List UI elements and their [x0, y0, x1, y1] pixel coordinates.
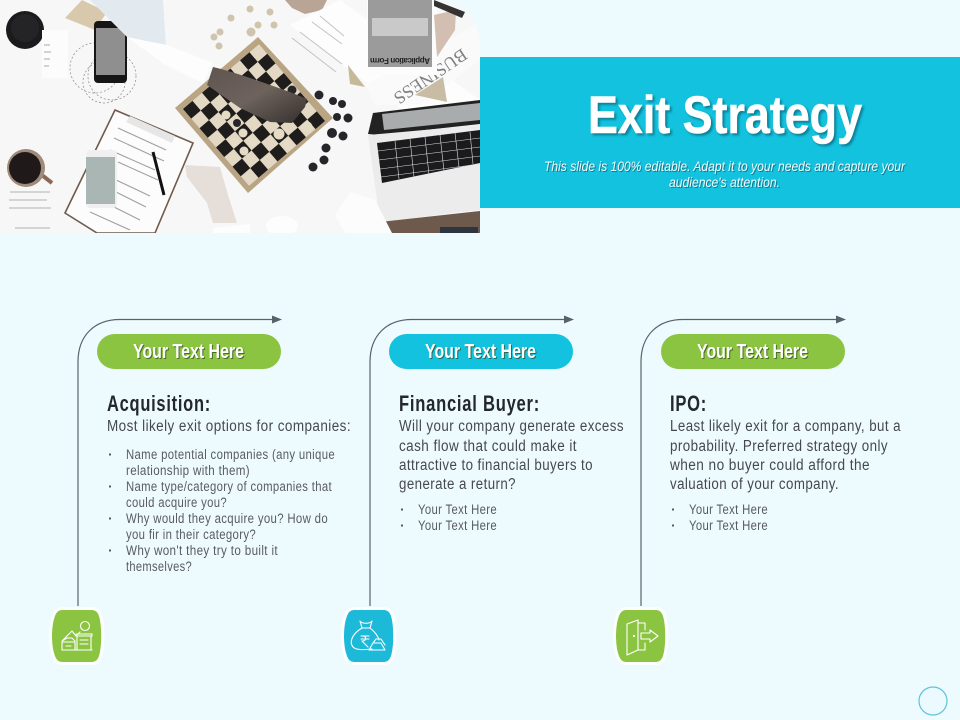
pill label: Your Text Here: [133, 340, 244, 363]
arrow connector: [78, 316, 282, 606]
description: Most likely exit options for companies:: [107, 418, 351, 435]
subtitle: This slide is 100% editable. Adapt it to your needs and capture your: [544, 159, 905, 174]
coffee mug: [7, 149, 52, 187]
photo: chess game on a business desk: [0, 0, 480, 236]
bullet list: [672, 502, 768, 533]
heading: IPO:: [670, 391, 707, 416]
chess board: [175, 37, 333, 193]
bullet list: Your Text Here: [418, 502, 497, 517]
box corner: [65, 0, 107, 30]
description: cash flow that could make it: [399, 438, 577, 455]
wood corner: [380, 211, 480, 233]
notes left: [42, 30, 51, 66]
circle diagram sheet: [70, 43, 136, 103]
description: valuation of your company.: [670, 476, 839, 493]
clipboard: [65, 110, 193, 233]
icon: buildings with dollar: [52, 610, 101, 662]
kraft: [415, 77, 447, 102]
pen: [153, 152, 164, 195]
bullet list: Name potential companies (any unique: [126, 447, 335, 462]
application form: [367, 0, 437, 75]
sleeve arm: [90, 0, 166, 44]
bullet list: [401, 502, 497, 533]
description: when no buyer could afford the: [669, 457, 870, 474]
bullet list: Your Text Here: [689, 518, 768, 533]
panel: financial buyer: [344, 316, 624, 662]
title: Exit Strategy: [588, 86, 862, 145]
title banner: [480, 57, 960, 208]
description: attractive to financial buyers to: [399, 457, 593, 474]
description: [399, 418, 624, 493]
paper sheets right: [318, 8, 323, 11]
description: Least likely exit for a company, but a: [670, 418, 901, 435]
bullet list: you fir in their category?: [126, 527, 256, 542]
bullet list: Why won't they try to built it: [126, 543, 278, 558]
bullet list: themselves?: [126, 559, 192, 574]
bullet list: Your Text Here: [418, 518, 497, 533]
chess pieces scattered top: [210, 6, 278, 50]
pill label: Your Text Here: [425, 340, 536, 363]
bullet list: Why would they acquire you? How do: [126, 511, 328, 526]
navigation circle: [919, 687, 947, 715]
top hand: [285, 0, 327, 14]
wrist right: [434, 0, 465, 57]
bullet list: relationship with them): [126, 463, 250, 478]
icon: exit door with arrow: [616, 610, 665, 662]
cup bottom: [266, 216, 298, 236]
subtitle: [544, 159, 905, 190]
dark hand: [207, 67, 307, 123]
arrow connector: [370, 316, 574, 606]
bullet list: Your Text Here: [689, 502, 768, 517]
light hand: [185, 165, 237, 223]
description: Will your company generate excess: [399, 418, 624, 435]
pill label: [97, 334, 281, 369]
pill label: [661, 334, 845, 369]
bullet list: Name type/category of companies that: [126, 479, 332, 494]
panel: acquisition: [52, 316, 351, 662]
white phone: [86, 150, 117, 208]
phone: [94, 21, 127, 83]
description: generate a return?: [399, 476, 516, 493]
subtitle: audience's attention.: [669, 175, 780, 190]
icon: coffee cup top view: [6, 11, 44, 49]
description: probability. Preferred strategy only: [670, 438, 888, 455]
heading: Financial Buyer:: [399, 391, 540, 416]
bullet list: [109, 447, 335, 574]
notes bottom: [378, 206, 392, 233]
application form: Application Form: [370, 56, 430, 65]
white pieces on board: [222, 110, 312, 156]
newspaper: BUSINESS: [390, 45, 471, 108]
black pieces beside board: [233, 86, 352, 172]
handwritten notes: [9, 192, 51, 228]
laptop: [368, 100, 480, 222]
bullet list: could acquire you?: [126, 495, 227, 510]
pill label: [389, 334, 573, 369]
description: [669, 418, 901, 493]
heading: Acquisition:: [107, 391, 211, 416]
arrow connector: [641, 316, 846, 606]
panel: ipo: [616, 316, 901, 662]
icon: money bag with rupee: [344, 610, 393, 662]
pill label: Your Text Here: [697, 340, 808, 363]
